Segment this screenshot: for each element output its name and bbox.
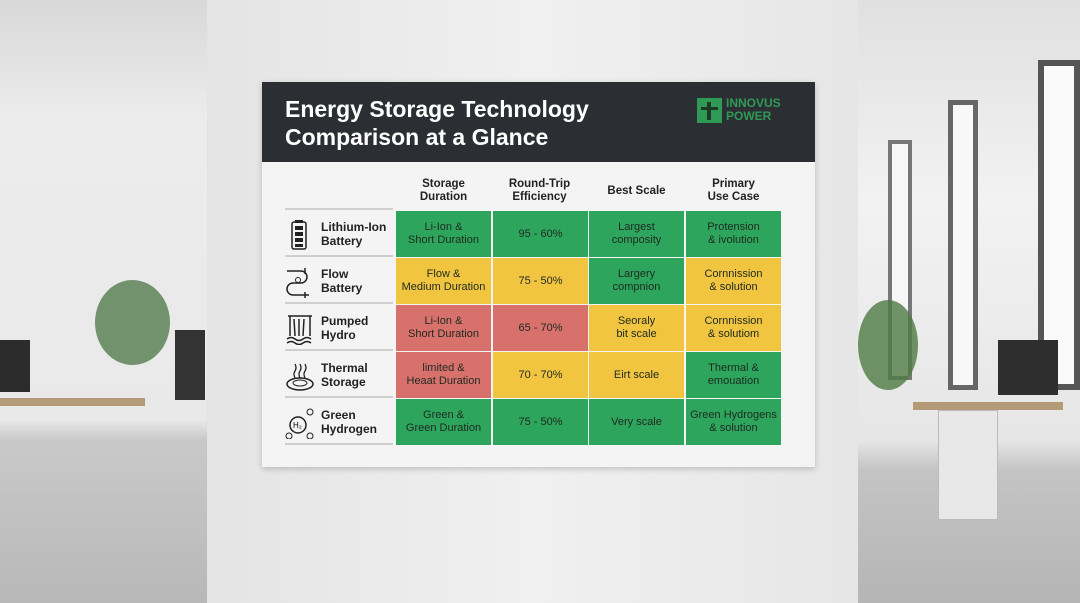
title: Comparison at a Glance bbox=[285, 124, 548, 150]
text: Best Scale bbox=[607, 185, 666, 197]
text: Storage bbox=[321, 375, 366, 389]
plant left bbox=[95, 280, 170, 365]
text: bit scale bbox=[616, 328, 657, 340]
text: emouation bbox=[708, 375, 759, 387]
text: Short Duration bbox=[408, 234, 479, 246]
text: Green bbox=[321, 408, 356, 422]
wall bbox=[207, 0, 858, 603]
text: Storage bbox=[422, 178, 465, 190]
column headers bbox=[420, 178, 759, 203]
text: 75 - 50% bbox=[518, 274, 563, 286]
text: Li-Ion & bbox=[425, 221, 462, 233]
background: left office bbox=[0, 0, 207, 603]
text: Flow bbox=[321, 267, 348, 281]
text: & solutiom bbox=[708, 328, 759, 340]
text: 70 - 70% bbox=[518, 368, 563, 380]
background: right office bbox=[858, 0, 1080, 603]
text: Green & bbox=[423, 409, 464, 421]
text: limited & bbox=[422, 362, 465, 374]
text: 65 - 70% bbox=[518, 322, 563, 334]
logo: INNOVUS bbox=[726, 96, 781, 110]
text: Duration bbox=[420, 191, 467, 203]
title bbox=[285, 96, 589, 150]
text: H₂ bbox=[293, 421, 302, 430]
text: Very scale bbox=[611, 416, 662, 428]
text: composity bbox=[612, 234, 661, 246]
text: Thermal & bbox=[708, 362, 759, 374]
text: Pumped bbox=[321, 314, 368, 328]
text: Seoraly bbox=[618, 315, 655, 327]
text: Medium Duration bbox=[402, 281, 485, 293]
text: Cornnission bbox=[704, 268, 763, 280]
desk right bbox=[913, 402, 1063, 410]
text: Protension bbox=[707, 221, 760, 233]
table cells bbox=[396, 211, 781, 445]
text: Heaat Duration bbox=[406, 375, 480, 387]
text: Largery bbox=[618, 268, 655, 280]
logo bbox=[697, 96, 781, 123]
text: Green Hydrogens bbox=[690, 409, 777, 421]
text: Efficiency bbox=[512, 191, 567, 203]
text: 95 - 60% bbox=[518, 228, 563, 240]
text: Flow & bbox=[427, 268, 460, 280]
text: Short Duration bbox=[408, 328, 479, 340]
text: Cornnission bbox=[704, 315, 763, 327]
text: Lithium-Ion bbox=[321, 220, 386, 234]
text: & solution bbox=[709, 281, 758, 293]
text: Primary bbox=[712, 178, 755, 190]
logo: POWER bbox=[726, 109, 771, 123]
text: Largest bbox=[618, 221, 655, 233]
windows bbox=[888, 140, 912, 380]
text: Hydrogen bbox=[321, 422, 377, 436]
desk left bbox=[0, 398, 145, 406]
text: & ivolution bbox=[708, 234, 759, 246]
text: Battery bbox=[321, 281, 362, 295]
text: Use Case bbox=[708, 191, 759, 203]
text: Battery bbox=[321, 234, 362, 248]
text: Li-Ion & bbox=[425, 315, 462, 327]
text: Round-Trip bbox=[509, 178, 570, 190]
text: Green Duration bbox=[406, 422, 481, 434]
plant right bbox=[858, 300, 918, 390]
text: 75 - 50% bbox=[518, 416, 563, 428]
text: & solution bbox=[709, 422, 758, 434]
poster bbox=[262, 82, 815, 467]
text: Thermal bbox=[321, 361, 368, 375]
row labels bbox=[285, 220, 393, 445]
title: Energy Storage Technology bbox=[285, 96, 589, 122]
text: Eirt scale bbox=[614, 368, 659, 380]
text: Hydro bbox=[321, 328, 356, 342]
header bbox=[262, 82, 815, 162]
text: compnion bbox=[613, 281, 660, 293]
